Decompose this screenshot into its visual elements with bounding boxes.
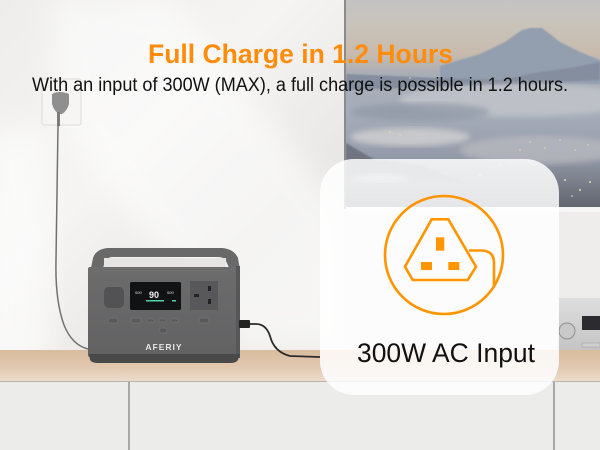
handle opening	[104, 258, 226, 267]
table top	[0, 350, 600, 381]
card: 300W AC input	[320, 159, 559, 395]
control buttons	[108, 318, 209, 333]
distant ridge	[346, 62, 600, 90]
power cord on wall	[56, 125, 88, 349]
round input port	[104, 287, 124, 308]
output cable	[240, 324, 320, 357]
display: 90	[149, 290, 159, 300]
background: wall	[0, 0, 600, 351]
base	[89, 354, 240, 363]
audio receiver	[558, 298, 600, 351]
mountain	[440, 28, 600, 84]
power station	[88, 248, 250, 363]
brand name: AFERIY	[145, 342, 183, 352]
title: Full Charge in 1.2 Hours	[148, 39, 453, 69]
main body	[88, 267, 240, 357]
subtitle: With an input of 300W (MAX), a full charge is possible in 1.2 hours.	[32, 75, 568, 96]
card label: 300W AC Input	[357, 338, 535, 368]
AC socket	[190, 281, 218, 310]
display: 000	[135, 290, 142, 295]
wall socket and plug	[42, 79, 81, 126]
display: 000	[167, 290, 174, 295]
dark hillside	[346, 143, 374, 160]
cloud sea	[400, 84, 600, 116]
cabinet doors	[0, 381, 600, 450]
city lights	[384, 77, 591, 197]
wall light streaks	[0, 16, 320, 350]
plug on side	[239, 320, 250, 328]
icon: UK plug in circle	[385, 196, 503, 314]
display	[130, 282, 181, 310]
television with landscape	[344, 0, 600, 212]
handle	[91, 248, 240, 270]
